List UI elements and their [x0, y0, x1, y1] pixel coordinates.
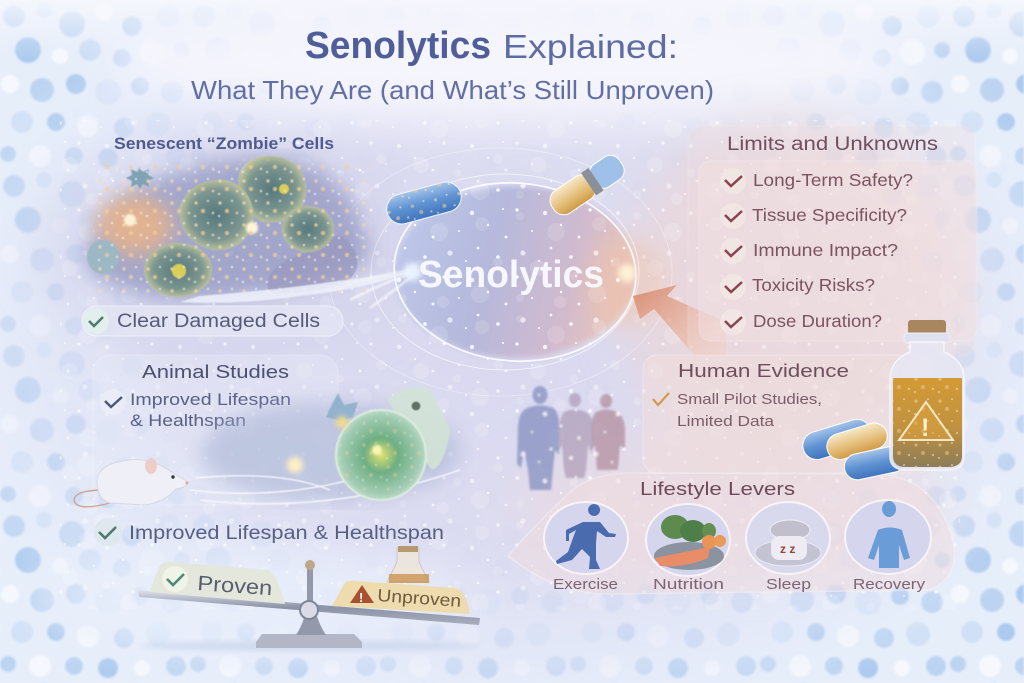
label: Clear Damaged Cells — [117, 311, 320, 332]
capsule: gold and blue — [545, 151, 628, 219]
pan: proven — [149, 562, 285, 604]
panel: lifestyle levers — [508, 473, 954, 594]
balance scale: proven vs unproven — [138, 546, 480, 651]
icon: warning: ! — [359, 590, 363, 605]
icon: check — [653, 393, 669, 405]
icon: glowing body — [868, 501, 910, 568]
central Senolytics hub — [328, 148, 672, 396]
finding text: Improved Lifespan — [130, 391, 291, 409]
lever: recovery: Recovery — [853, 576, 926, 593]
panel: animal studies — [93, 355, 338, 505]
evidence text: Small Pilot Studies, — [677, 391, 822, 408]
finding text: & Healthspan — [130, 412, 246, 430]
icon: warning triangle — [899, 402, 953, 442]
title line: Explained: — [503, 28, 678, 65]
capsule: blue — [383, 179, 465, 227]
pan: unproven — [332, 581, 470, 614]
item: long-term safety — [720, 168, 913, 194]
lever: nutrition — [646, 504, 730, 593]
icon: runner — [556, 504, 616, 569]
heading: Lifestyle Levers — [640, 479, 795, 499]
small bottle on pan — [387, 546, 429, 583]
illustration: warning bottle — [890, 320, 964, 470]
lever: sleep: Sleep — [766, 576, 811, 593]
subtitle: What They Are (and What’s Still Unproven) — [191, 75, 714, 105]
panel: limits and unknowns — [688, 126, 977, 356]
silhouettes: human figures — [517, 386, 627, 490]
hub label: Senolytics — [418, 254, 604, 296]
item: toxicity risks — [720, 274, 875, 300]
heading: Limits and Unknowns — [727, 134, 938, 155]
base and post — [256, 560, 362, 648]
lever: recovery — [845, 500, 931, 593]
panel: human evidence — [643, 355, 933, 473]
heading: Senescent “Zombie” Cells — [114, 135, 334, 153]
icon: food plate — [654, 515, 726, 570]
label: Proven — [197, 572, 273, 600]
panel: senescent zombie cells — [82, 135, 412, 336]
arrow: limits feed back to hub — [633, 285, 726, 356]
illustration: capsules — [799, 416, 908, 482]
lever: sleep — [746, 502, 830, 593]
icon: check — [94, 518, 122, 546]
callout: improved lifespan and healthspan — [94, 518, 444, 546]
title line: Senolytics — [305, 25, 491, 67]
cell cluster illustration — [85, 156, 412, 303]
label: Improved Lifespan & Healthspan — [129, 523, 444, 544]
item: long-term safety: Long-Term Safety? — [753, 170, 913, 190]
item: dose duration: Dose Duration? — [753, 311, 882, 331]
beam — [138, 590, 480, 625]
icon: check — [162, 566, 188, 592]
icon: warning triangle: ! — [921, 414, 929, 442]
item: tissue specificity — [720, 203, 907, 229]
item: dose duration — [720, 309, 882, 335]
item: immune impact — [720, 238, 898, 264]
heading: Human Evidence — [678, 360, 849, 381]
evidence text: Limited Data — [677, 413, 775, 430]
icon: sleep pillow: z z — [780, 542, 795, 556]
label: Unproven — [377, 585, 462, 611]
item: immune impact: Immune Impact? — [753, 240, 898, 260]
icon: check — [83, 308, 109, 334]
item: toxicity risks: Toxicity Risks? — [752, 275, 875, 295]
heading: Animal Studies — [142, 361, 289, 382]
item: tissue specificity: Tissue Specificity? — [752, 205, 907, 225]
lever: exercise: Exercise — [553, 576, 618, 593]
title — [191, 25, 714, 105]
lever: nutrition: Nutrition — [653, 576, 724, 593]
icon: check — [100, 389, 126, 415]
callout: clear damaged cells — [82, 306, 343, 336]
lever: exercise — [544, 502, 628, 593]
illustration: white mouse — [74, 458, 188, 507]
illustration: cells and energy streams — [190, 387, 460, 504]
